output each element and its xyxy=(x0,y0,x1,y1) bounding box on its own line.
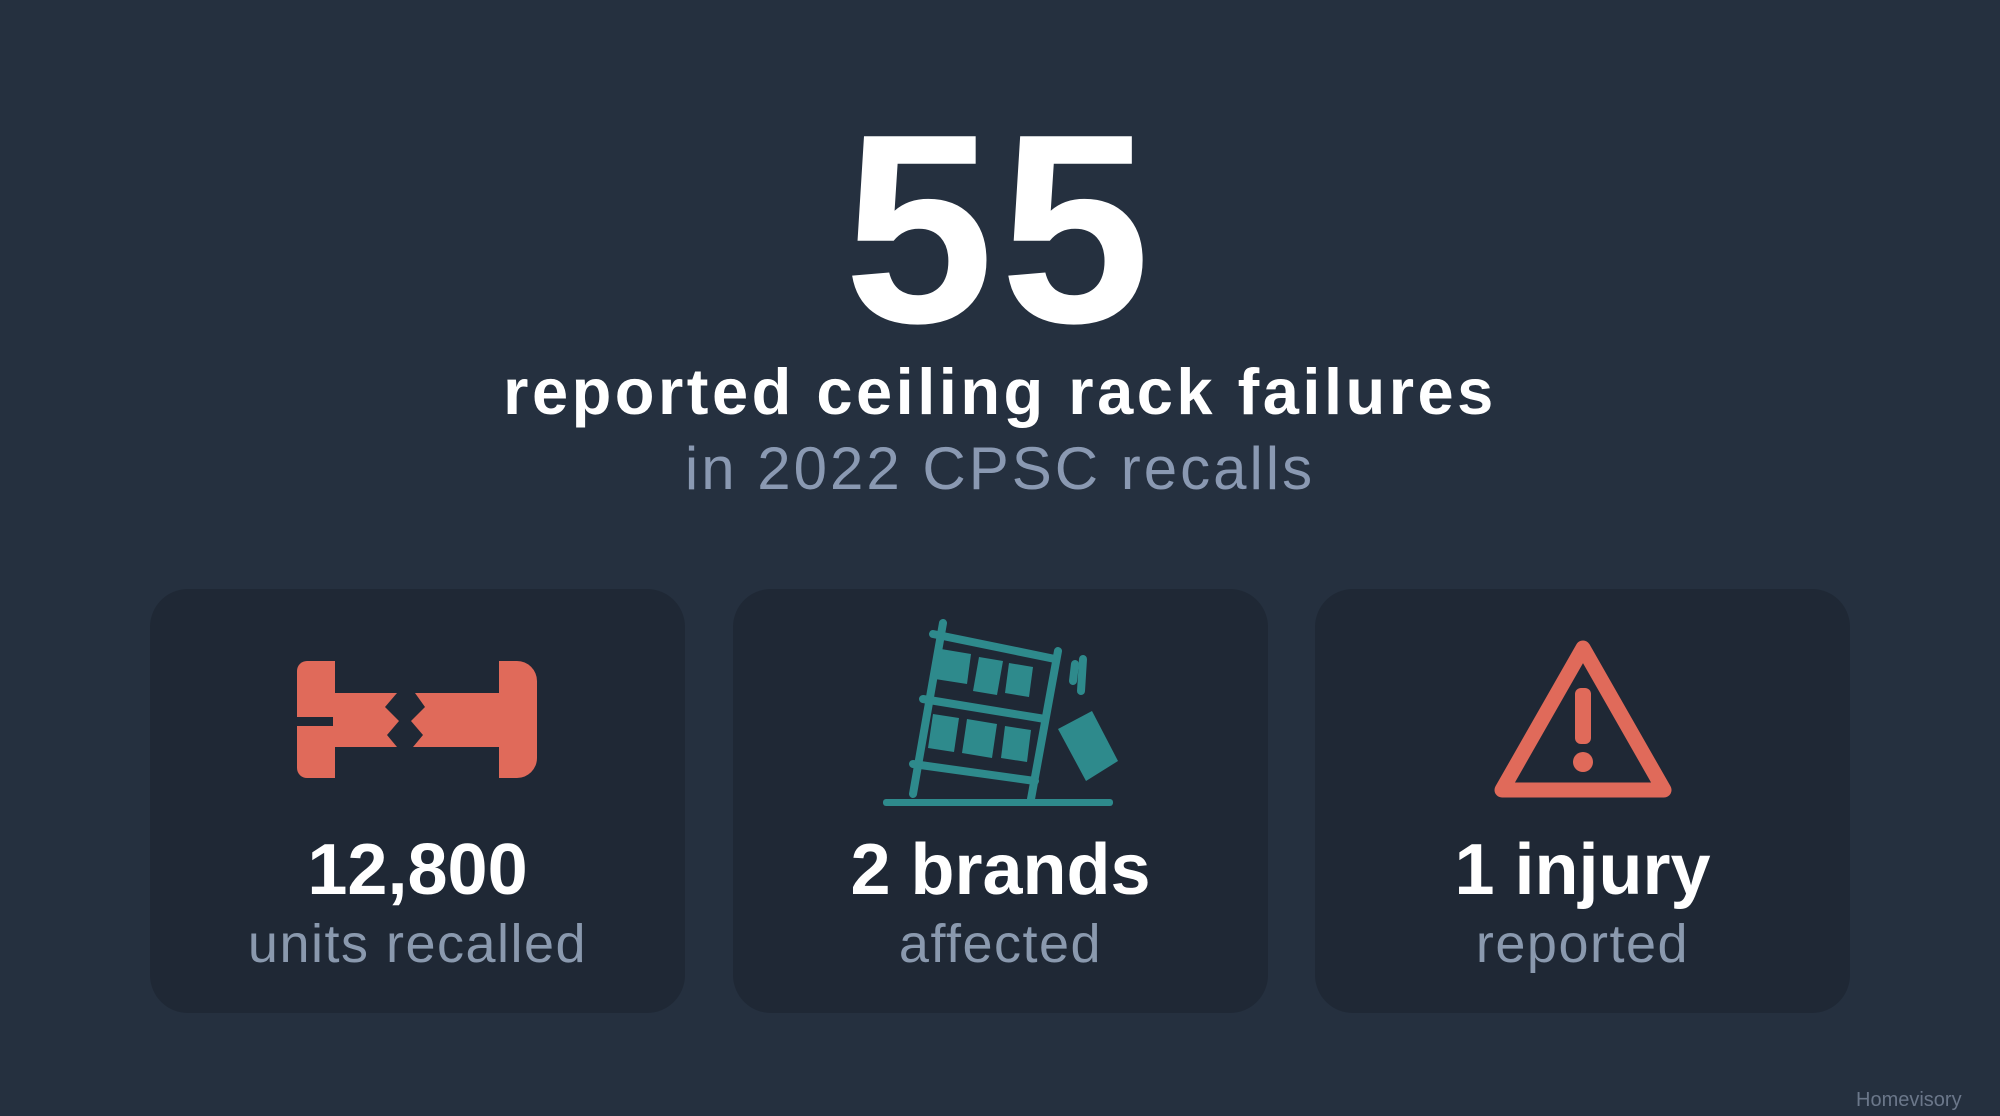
icon: warning triangle xyxy=(1494,640,1672,798)
stat value: 12,800 xyxy=(307,830,528,910)
headline number: 55 xyxy=(844,79,1156,380)
headline context: in 2022 CPSC recalls xyxy=(685,435,1315,502)
stat value: 2 brands xyxy=(850,830,1151,910)
panel: brands affected xyxy=(733,589,1268,1013)
panel: units recalled xyxy=(150,589,685,1013)
stat value: 1 injury xyxy=(1454,830,1711,910)
icon: broken beam xyxy=(297,661,537,778)
stat label: affected xyxy=(899,914,1102,974)
stat label: units recalled xyxy=(248,914,587,974)
stat label: reported xyxy=(1476,914,1689,974)
icon: tipping shelf xyxy=(883,619,1118,806)
watermark: Homevisory xyxy=(1856,1089,1962,1111)
panel: injury reported xyxy=(1315,589,1850,1013)
headline subtitle: reported ceiling rack failures xyxy=(503,355,1497,428)
